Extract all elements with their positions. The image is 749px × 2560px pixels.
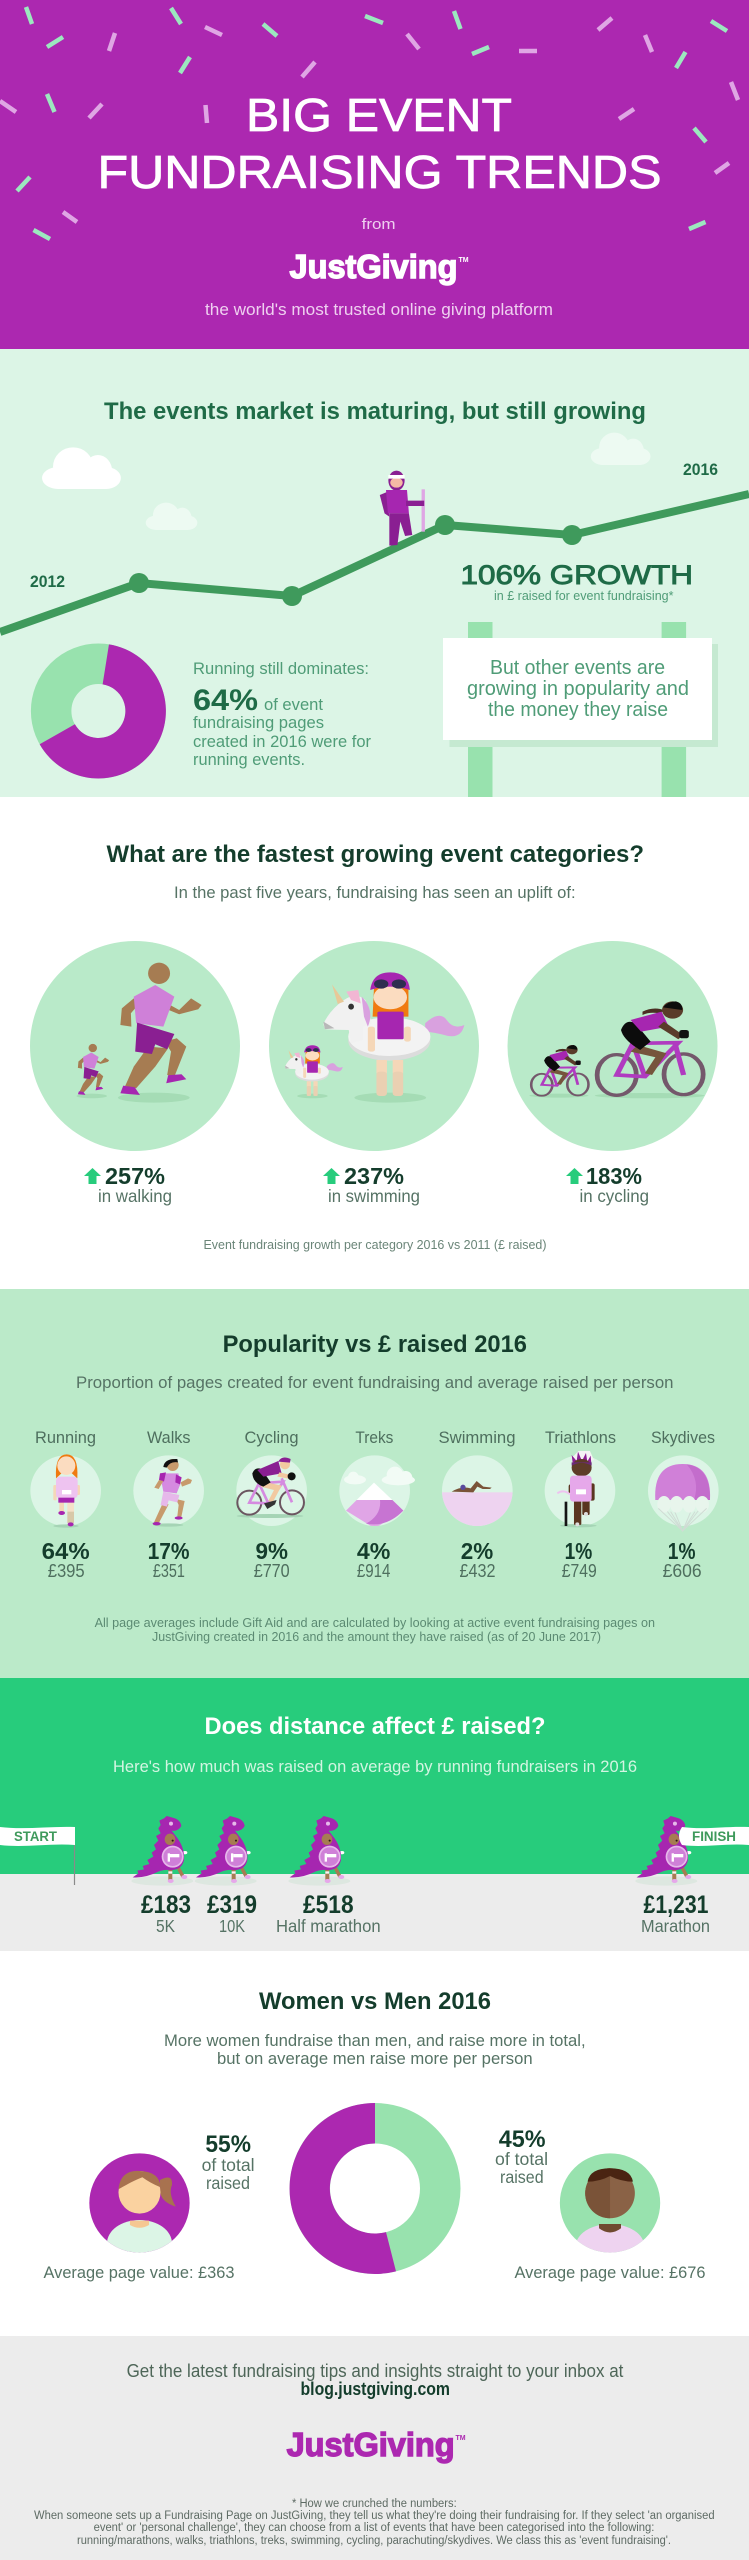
donut chart: share raised [290, 2103, 440, 2274]
column labels: Skydives [651, 1428, 715, 1447]
avatar: man [560, 2153, 660, 2253]
icons: treks, swimming, triathlons and skydives [339, 1451, 719, 1531]
label 2012: 2012 [30, 572, 65, 591]
stat: 55%: 55% [205, 2131, 251, 2158]
circle: swimming illustration [269, 941, 479, 1151]
stat: 106% growth: in £ raised for event fundraising* [494, 589, 674, 603]
confetti: pale purple [0, 18, 738, 222]
heading: Women vs Men 2016 [259, 1988, 491, 2015]
average raised values: £395 [48, 1561, 85, 1581]
icons: running, walks and cycling [30, 1454, 307, 1528]
amounts [141, 1891, 709, 1919]
logo: JustGiving purple: JustGiving [287, 2426, 455, 2463]
title [98, 89, 662, 198]
stat: swimming: 237% [344, 1163, 404, 1189]
stat: walking: 257% [105, 1163, 165, 1189]
average raised values [48, 1561, 702, 1581]
signpost: the money they raise [488, 699, 668, 721]
footnote: All page averages include Gift Aid and are calculated by looking at active event fundraising pages on [95, 1615, 655, 1630]
title: BIG EVENT [246, 89, 512, 141]
stat: cycling [566, 1163, 649, 1206]
from label: from [362, 216, 396, 233]
logo: JustGiving white: JustGiving [290, 248, 458, 285]
footnote: how we crunched the numbers: * How we crunched the numbers: [292, 2498, 457, 2510]
stat: 106% growth: 106% GROWTH [460, 560, 693, 590]
text: running still dominates: created in 2016 were for [193, 732, 371, 751]
panel: popularity vs raised [0, 1289, 749, 1678]
column labels: Walks [147, 1428, 190, 1447]
average raised values: £432 [460, 1561, 496, 1581]
icon: swimmer in water [442, 1481, 512, 1526]
panel: fastest growing categories [0, 797, 749, 1289]
icon: cyclist [237, 1457, 304, 1518]
subheading: Here's how much was raised on average by running fundraisers in 2016 [113, 1757, 637, 1776]
footnote: how we crunched the numbers: running/marathons, walks, triathlons, treks, swimming, cycling, parachuting/skydives. We class this as 'event fundraising'. [77, 2535, 671, 2547]
signpost: growing in popularity and [467, 678, 689, 700]
stat: 45%: 45% [499, 2126, 546, 2153]
distance labels: 5K [156, 1916, 175, 1936]
percentages: 64% [42, 1538, 90, 1564]
subheading: but on average men raise more per person [217, 2049, 533, 2068]
stat: 55%: raised [206, 2173, 250, 2193]
distance labels [156, 1916, 710, 1936]
icon: walker [153, 1459, 192, 1527]
distance labels: 10K [219, 1916, 245, 1936]
average raised values: £770 [254, 1561, 290, 1581]
call to action [127, 2361, 623, 2399]
confetti: green [17, 7, 727, 239]
title: FUNDRAISING TRENDS [98, 146, 662, 198]
footnote: how we crunched the numbers: When someone sets up a Fundraising Page on JustGiving, they tell us what they're doing their fundraising for. If they select 'an organised [34, 2510, 715, 2522]
finish flag [679, 1827, 749, 1846]
footnote [95, 1615, 655, 1644]
average raised values: £351 [153, 1561, 185, 1581]
stat: 45%: of total [495, 2149, 548, 2169]
footnote: how we crunched the numbers [34, 2498, 715, 2547]
start flag: START [14, 1829, 58, 1844]
percentages: 4% [357, 1538, 390, 1564]
dinosaur runners [131, 1816, 697, 1886]
stat: 55% [202, 2131, 255, 2193]
panel: women vs men [44, 1992, 705, 2282]
subheading: In the past five years, fundraising has seen an uplift of: [174, 883, 576, 902]
column labels: Swimming [438, 1428, 516, 1447]
percentages [42, 1538, 695, 1564]
stat: 45%: raised [500, 2167, 544, 2187]
circle: cycling illustration [508, 941, 718, 1151]
panel: purple header [0, 0, 749, 349]
column labels: Treks [355, 1428, 393, 1447]
avatar: woman [89, 2153, 190, 2253]
distance labels: Half marathon [276, 1916, 381, 1936]
stat: cycling: in cycling [580, 1186, 649, 1206]
heading: The events market is maturing, but still growing [104, 398, 646, 425]
circle: walking illustration [30, 941, 240, 1151]
panel: events market growing [0, 349, 749, 797]
subheading: More women fundraise than men, and raise more in total, [164, 2031, 586, 2050]
logo: JustGiving white: TM [458, 257, 469, 264]
start flag [0, 1827, 75, 1885]
stat: cycling: 183% [586, 1163, 642, 1189]
text: running still dominates: running events. [193, 750, 305, 769]
text: running still dominates: 64% [193, 684, 258, 717]
clouds [42, 433, 651, 530]
panel: distance vs raised [0, 1678, 749, 1951]
stat: 45% [495, 2126, 548, 2187]
column labels [35, 1428, 715, 1447]
percentages: 2% [461, 1538, 493, 1564]
stat: swimming [323, 1163, 420, 1206]
panel: footer [0, 2336, 749, 2560]
icon: triathlete [557, 1451, 597, 1527]
icon: runner [53, 1454, 80, 1528]
distance labels: Marathon [641, 1916, 710, 1936]
stat: 106% growth [460, 560, 693, 603]
percentages: 9% [256, 1538, 288, 1564]
average raised values: £914 [357, 1561, 390, 1581]
icon: parachute [655, 1464, 710, 1531]
average raised values: £749 [562, 1561, 597, 1581]
percentages: 1% [565, 1538, 592, 1564]
finish flag: FINISH [692, 1829, 736, 1844]
column labels: Cycling [244, 1428, 298, 1447]
footnote: JustGiving created in 2016 and the amount they have raised (as of 20 June 2017) [152, 1629, 601, 1644]
amounts: £319 [207, 1891, 257, 1919]
amounts: £518 [303, 1891, 354, 1919]
amounts: £1,231 [644, 1891, 709, 1919]
footnote: Event fundraising growth per category 2016 vs 2011 (£ raised) [204, 1238, 546, 1252]
heading: Does distance affect £ raised? [204, 1713, 546, 1740]
stat: walking [84, 1163, 172, 1206]
signpost: But other events are [490, 657, 665, 679]
logo: JustGiving purple: TM [456, 2435, 466, 2442]
stat: walking: in walking [98, 1186, 172, 1206]
text: running still dominates [193, 659, 371, 769]
heading: What are the fastest growing event categories? [106, 841, 644, 868]
column labels: Running [35, 1428, 96, 1447]
text: running still dominates: of event [264, 695, 323, 714]
percentages: 17% [148, 1538, 190, 1564]
stat: 55%: of total [202, 2155, 255, 2175]
percentages: 1% [668, 1538, 696, 1564]
tagline: the world's most trusted online giving platform [205, 300, 553, 319]
donut chart: 64% running [40, 644, 166, 778]
footnote: how we crunched the numbers: event' or 'personal challenge', they can choose from a list of events that have been categorised into the following: [94, 2522, 654, 2534]
line chart: growth 2012 to 2016 [0, 494, 749, 632]
label: men average: Average page value: £676 [514, 2263, 706, 2282]
average raised values: £606 [663, 1561, 702, 1581]
label: women average: Average page value: £363 [44, 2263, 234, 2282]
signpost [443, 622, 718, 797]
call to action: Get the latest fundraising tips and insights straight to your inbox at [127, 2361, 623, 2381]
subheading: Proportion of pages created for event fundraising and average raised per person [76, 1373, 674, 1392]
text: running still dominates: Running still dominates: [193, 659, 369, 678]
column labels: Triathlons [545, 1428, 616, 1447]
label 2016: 2016 [683, 460, 718, 479]
heading: Popularity vs £ raised 2016 [223, 1331, 527, 1358]
call to action: blog.justgiving.com [300, 2379, 450, 2399]
amounts: £183 [141, 1891, 191, 1919]
subheading [164, 2031, 586, 2068]
icon: hiker [380, 471, 424, 546]
stat: swimming: in swimming [328, 1186, 420, 1206]
icon: mountain [344, 1467, 415, 1528]
text: running still dominates: fundraising pages [193, 713, 324, 732]
